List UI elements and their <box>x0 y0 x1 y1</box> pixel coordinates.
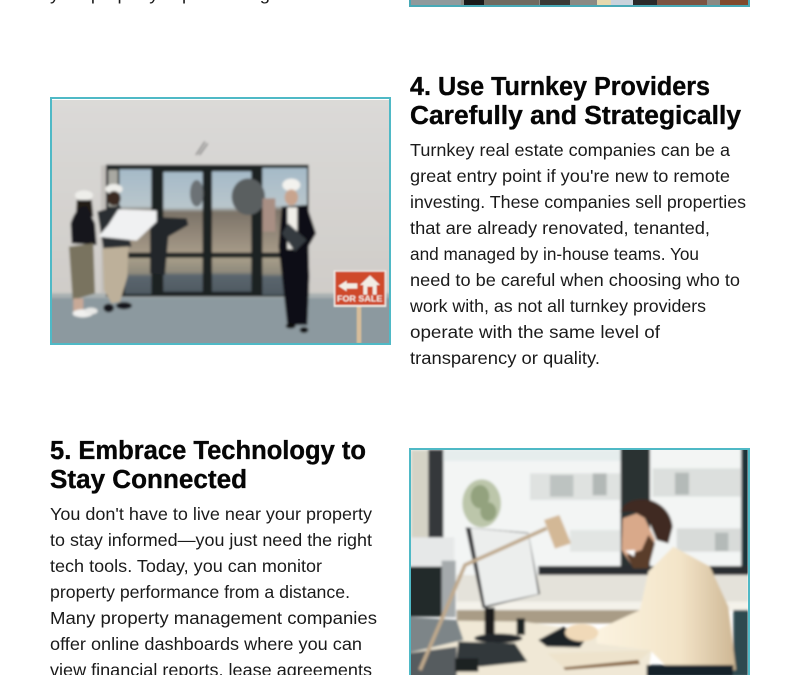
head <box>622 512 655 567</box>
text block: section 5 body: property performance from a distance. <box>50 582 350 602</box>
notebook <box>552 652 647 666</box>
desk <box>407 620 653 675</box>
photo: previous section image, cropped at top <box>409 0 750 7</box>
man: shirt <box>597 547 736 670</box>
text block: section 4 body: and managed by in-house teams. You <box>410 244 699 264</box>
photo: smiling man working at desktop computer <box>407 445 753 675</box>
text block: section 5 body: You don't have to live near your property <box>50 504 372 524</box>
woman right <box>282 179 300 191</box>
plant <box>462 479 501 527</box>
heading: section 5: 5. Embrace Technology to <box>50 437 366 465</box>
for-sale sign <box>334 270 386 343</box>
for-sale sign: FOR SALE <box>337 294 383 303</box>
lamp <box>420 528 547 670</box>
text block: section 4 body: operate with the same level of <box>410 322 660 342</box>
heading: section 4 <box>410 73 742 130</box>
man with plans <box>105 184 123 194</box>
text block: section 4 body: investing. These companies sell properties <box>410 192 746 212</box>
text block: section 4 body: Turnkey real estate companies can be a <box>410 140 730 160</box>
text block: section 5 body: tech tools. Today, you can monitor <box>50 556 322 576</box>
main monitor <box>466 527 540 608</box>
text block: section 5 body <box>50 504 377 675</box>
left monitor <box>407 537 454 567</box>
text block: section 4 body: transparency or quality. <box>410 348 600 368</box>
text block: section 5 body: offer online dashboards where you can <box>50 634 362 654</box>
text block: section 4 body: that are already renovated, tenanted, <box>410 218 710 238</box>
heading: section 5 <box>50 437 366 494</box>
reflected figure <box>150 217 188 275</box>
laptop <box>457 642 527 667</box>
text block: section 4 body: great entry point if you're new to remote <box>410 166 730 186</box>
text block: section 5 body: to stay informed—you just need the right <box>50 530 372 550</box>
woman left <box>75 190 93 200</box>
text block: section 4 body: need to be careful when choosing who to <box>410 270 740 290</box>
heading: section 4: 4. Use Turnkey Providers <box>410 73 710 101</box>
text block: section 5 body: Many property management companies <box>50 608 377 628</box>
keyboard and mouse <box>538 627 585 647</box>
heading: section 5: Stay Connected <box>50 466 247 494</box>
text block: section 4 body: work with, as not all turnkey providers <box>409 296 706 316</box>
text block: section 4 body <box>409 140 746 368</box>
photo: construction team with for-sale sign <box>47 95 393 349</box>
heading: section 4: Carefully and Strategically <box>410 102 742 130</box>
